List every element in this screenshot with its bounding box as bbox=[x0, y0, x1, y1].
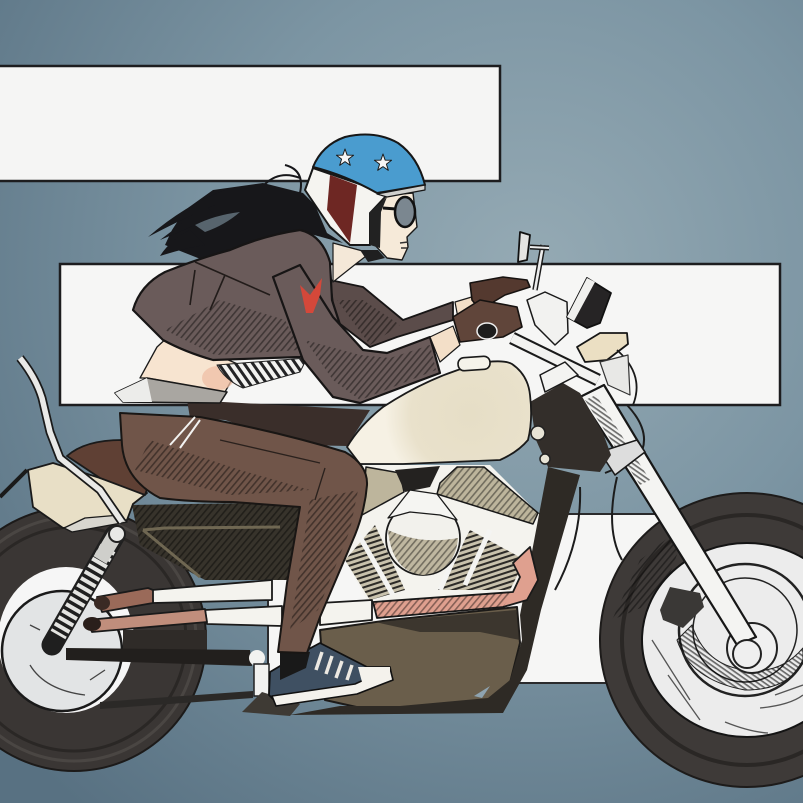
helmet bbox=[305, 135, 425, 248]
sunglasses bbox=[383, 197, 415, 227]
striped top bbox=[217, 358, 307, 388]
headlight bbox=[540, 333, 637, 405]
engine bbox=[345, 465, 540, 606]
sissy bar highlight bbox=[20, 358, 122, 522]
lower strut bbox=[100, 691, 253, 709]
midriff peach shading bbox=[202, 366, 234, 390]
brake caliper bbox=[660, 587, 704, 628]
studded belt bbox=[115, 378, 227, 403]
bare midriff bbox=[140, 335, 240, 392]
rear wheel bbox=[0, 507, 207, 771]
mirror bbox=[518, 232, 530, 262]
gas cap bbox=[458, 356, 490, 371]
gas tank bbox=[347, 361, 531, 464]
right cylinder fins bbox=[438, 530, 525, 590]
footpeg shadow base bbox=[242, 692, 300, 716]
handlebar bbox=[512, 245, 598, 380]
exhaust pipes bbox=[83, 580, 372, 632]
handlebar controls bbox=[527, 292, 568, 345]
instrument bbox=[567, 278, 611, 328]
footpeg post bbox=[254, 664, 269, 696]
transmission case bbox=[320, 607, 520, 710]
rear fender bbox=[28, 463, 147, 528]
long hair bbox=[148, 165, 343, 260]
seat front shadow bbox=[187, 400, 370, 446]
dark belt guard bbox=[66, 648, 252, 666]
helmet stars bbox=[336, 149, 392, 170]
striped fender bracket bbox=[64, 515, 127, 532]
cables bbox=[555, 405, 644, 590]
handlebar grip bbox=[477, 323, 497, 339]
far sleeve bbox=[330, 280, 453, 347]
steering neck bbox=[530, 383, 611, 472]
exhaust header bbox=[373, 547, 538, 618]
rear frame bbox=[132, 502, 305, 580]
left cylinder fins bbox=[345, 525, 405, 600]
front wheel bbox=[600, 493, 803, 787]
fender strut bbox=[0, 470, 27, 497]
right rocker box bbox=[437, 467, 538, 524]
wrists bbox=[430, 296, 478, 362]
axle ball bbox=[249, 650, 265, 666]
lower frame cradle bbox=[290, 467, 580, 715]
rear shock absorber bbox=[52, 526, 125, 645]
gap in cradle bbox=[474, 686, 490, 698]
face bbox=[360, 193, 417, 262]
neck bbox=[333, 243, 370, 282]
neck bolts bbox=[531, 426, 550, 464]
white bar: middle bbox=[60, 264, 780, 405]
round engine cover bbox=[386, 501, 460, 575]
sissy bar bbox=[20, 358, 122, 522]
gloves bbox=[453, 277, 530, 342]
front fork bbox=[580, 385, 761, 668]
near sleeve bbox=[273, 265, 440, 403]
white bar: bottom bbox=[268, 514, 708, 683]
seat bbox=[67, 440, 150, 495]
primary cover dark hatch bbox=[375, 610, 520, 640]
jacket patch bbox=[300, 278, 322, 313]
left rocker box bbox=[362, 467, 404, 515]
far sleeve hatch bbox=[337, 300, 400, 345]
white bar: top bbox=[0, 66, 500, 181]
leg and hip bbox=[120, 413, 367, 653]
front hub rings bbox=[652, 564, 803, 733]
shoe bbox=[269, 643, 393, 706]
jacket body bbox=[133, 230, 345, 360]
